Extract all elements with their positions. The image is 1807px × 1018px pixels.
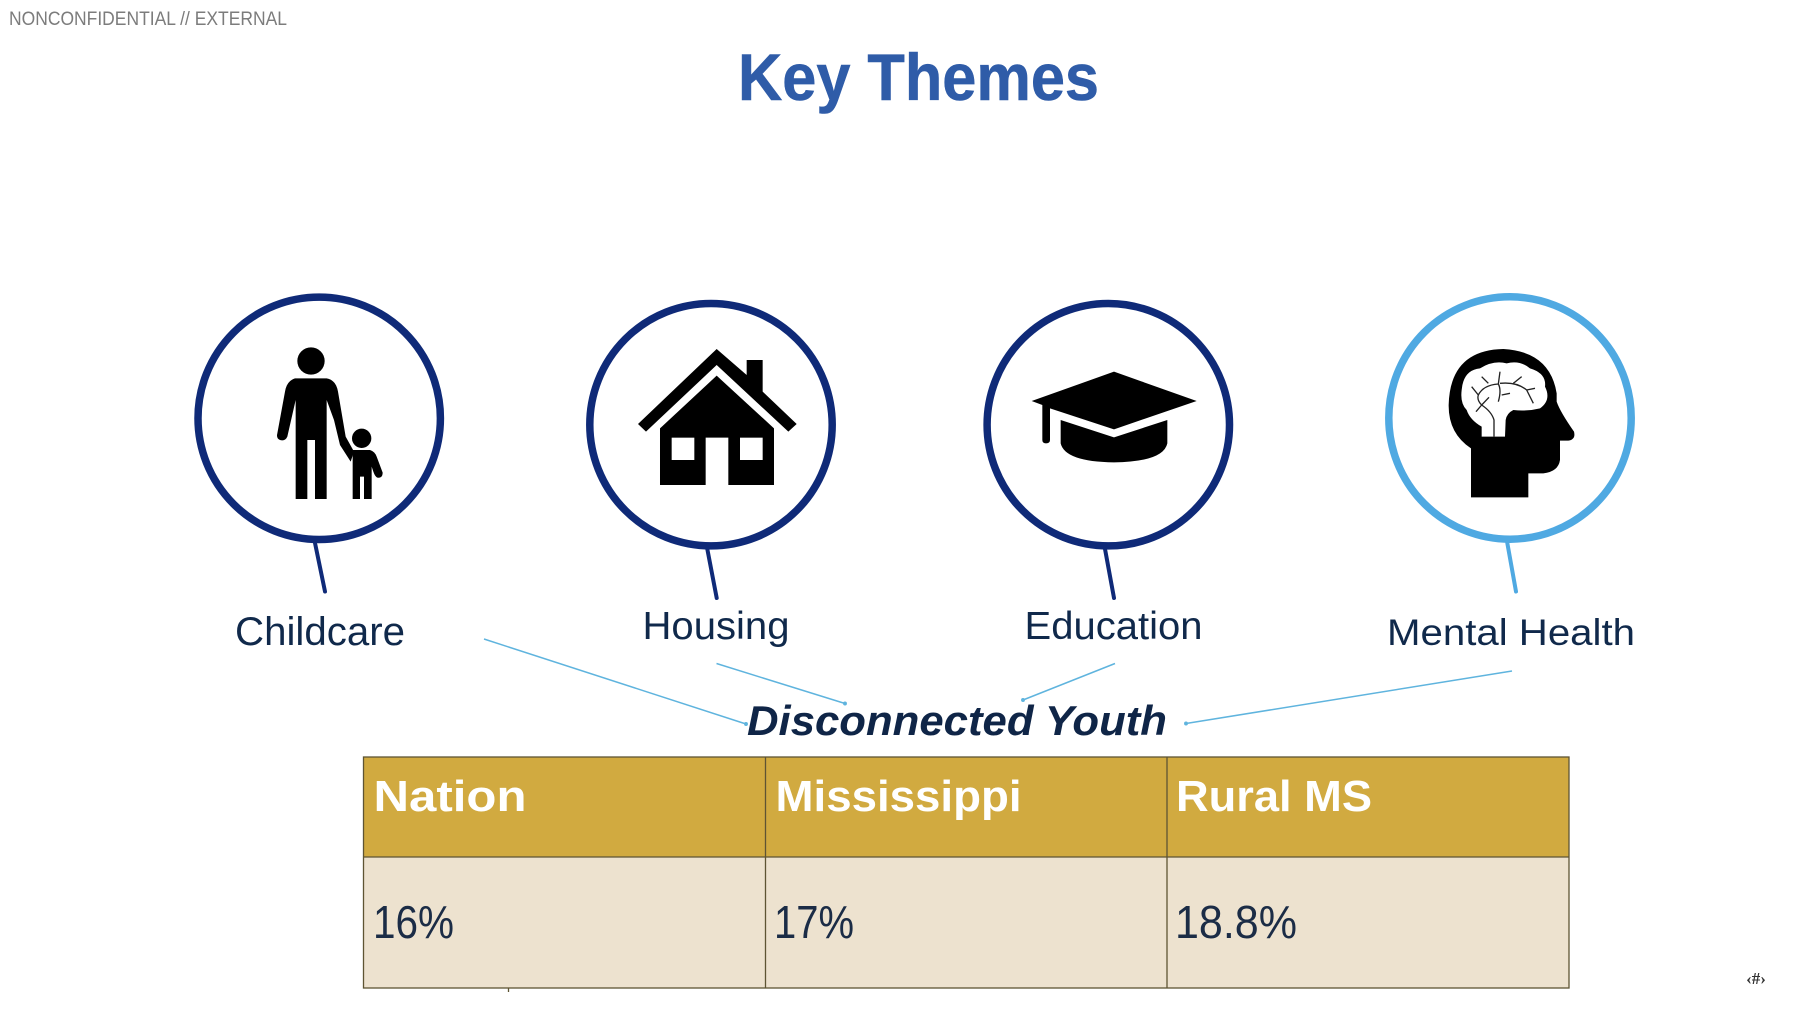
childcare ring — [198, 297, 440, 540]
header: mississippi: Mississippi — [776, 772, 1022, 821]
childcare stem — [315, 543, 325, 592]
table value row — [364, 857, 1569, 988]
icon: adult and child — [277, 347, 383, 499]
table header row — [364, 757, 1569, 857]
mental health label: Mental Health — [1387, 612, 1635, 653]
header: rural ms: Rural MS — [1176, 772, 1372, 821]
theme: childcare — [198, 297, 440, 654]
housing ring — [590, 304, 832, 546]
mental health stem — [1507, 543, 1516, 592]
education ring — [987, 304, 1230, 546]
value: nation 16%: 16% — [373, 896, 454, 948]
value: rural ms 18.8%: 18.8% — [1175, 896, 1297, 948]
theme: mental health — [1387, 297, 1635, 653]
value: mississippi 17%: 17% — [774, 896, 854, 948]
header: nation: Nation — [374, 772, 526, 821]
table: disconnected youth rates — [364, 757, 1569, 992]
classification label: NONCONFIDENTIAL // EXTERNAL — [9, 9, 287, 30]
housing label: Housing — [642, 605, 790, 648]
heading: disconnected youth: Disconnected Youth — [747, 697, 1167, 744]
theme: education — [987, 304, 1230, 648]
arrows to disconnected youth — [484, 639, 1512, 725]
education stem — [1105, 549, 1114, 598]
icon: house — [638, 349, 797, 485]
icon: head with brain — [1449, 349, 1574, 497]
education label: Education — [1024, 605, 1202, 648]
childcare label: Childcare — [235, 610, 405, 654]
slide number placeholder: ‹#› — [1746, 969, 1766, 988]
mental health ring — [1389, 297, 1631, 539]
title: Key Themes — [738, 40, 1099, 114]
theme: housing — [590, 304, 832, 648]
housing stem — [707, 549, 717, 598]
icon: graduation cap — [1032, 372, 1197, 462]
